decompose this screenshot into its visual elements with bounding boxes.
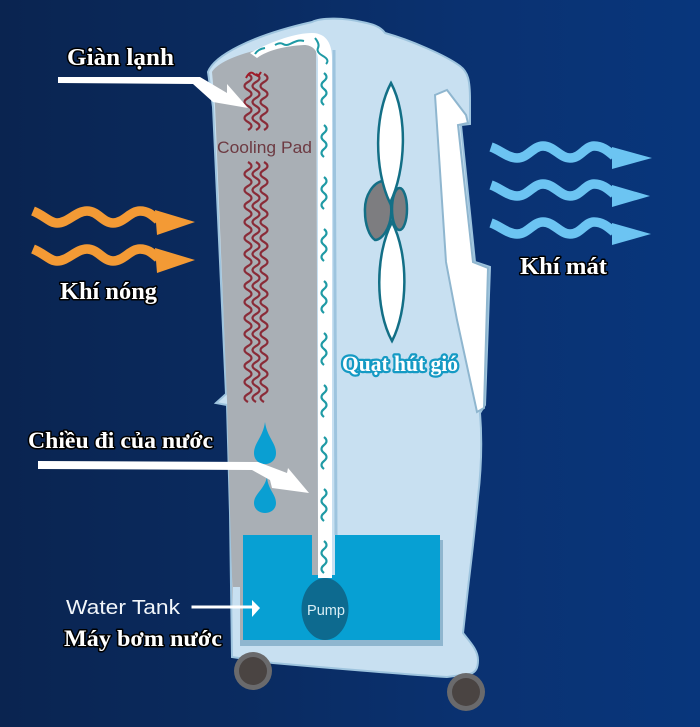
label: Chiều đi của nước: Chiều đi của nước	[28, 428, 213, 453]
label: Water Tank: Water Tank	[66, 597, 181, 619]
fan	[365, 83, 407, 341]
label: Máy bơm nước: Máy bơm nước	[64, 626, 222, 651]
label: Quạt hút gió: Quạt hút gió	[342, 351, 458, 376]
water drops	[254, 422, 276, 513]
water tank	[233, 535, 443, 647]
arrow: cooling pad pointer	[58, 77, 248, 108]
cooling pad waves	[244, 72, 268, 402]
water tube	[250, 33, 336, 578]
cool air arrows	[491, 146, 652, 245]
arrow: water tank pointer	[192, 600, 260, 617]
hot air arrows	[33, 210, 195, 273]
label: Khí nóng: Khí nóng	[60, 279, 157, 305]
arrow: water direction pointer	[38, 461, 309, 493]
pump	[302, 578, 348, 640]
label: Khí mát: Khí mát	[520, 254, 607, 280]
cooler body	[208, 19, 490, 677]
wheel: right	[447, 673, 485, 711]
outlet opening	[435, 90, 488, 412]
cooling chamber	[212, 42, 318, 640]
panel: air cooler	[208, 19, 490, 711]
label: Giàn lạnh: Giàn lạnh	[67, 45, 174, 71]
water squiggles in tube	[255, 38, 327, 573]
wheel: left	[234, 652, 272, 690]
cooling pad label: Cooling Pad	[217, 138, 312, 157]
pump: Pump	[307, 602, 345, 619]
